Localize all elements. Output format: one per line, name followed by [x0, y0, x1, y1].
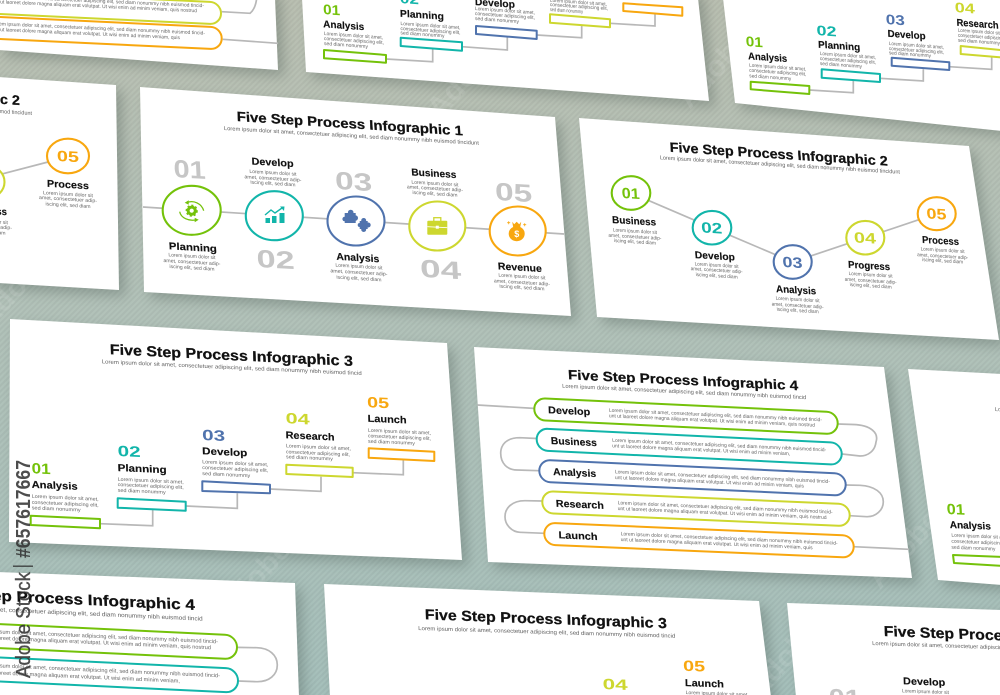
- step 04 text: amet, consectetuer adip-: [844, 277, 897, 286]
- step 01 text: Business: [612, 215, 657, 229]
- step 03 text: iscing elit, sed diam: [776, 307, 819, 315]
- step 03: consectetuer adipiscing elit,: [202, 465, 268, 474]
- step 05 node: 05: [926, 205, 947, 224]
- step 02: sed diam nonummy: [118, 488, 166, 496]
- step 02: 02: [117, 443, 141, 461]
- panel: top-right infographic 3 fragment: consectetuer adipiscing elit,: [820, 56, 876, 66]
- step 04 text: Lorem ipsum dolor sit: [848, 271, 893, 280]
- step 03 node: [774, 245, 812, 279]
- step 04: [285, 410, 353, 477]
- step 05: 05: [367, 394, 389, 412]
- step 01 text: iscing elit, sed diam: [614, 238, 656, 247]
- step 3 circle: [328, 196, 384, 246]
- step 3 text: [330, 252, 388, 283]
- row: Analysis: Analysis: [553, 467, 597, 480]
- icon: briefcase: [427, 218, 447, 235]
- step 5 text: [494, 261, 550, 292]
- panel: top-middle infographic 3 fragment: consectetuer adipiscing elit,: [400, 26, 461, 36]
- panel: bottom-right infographic 1 fragment: [787, 603, 1000, 695]
- step 5 text: Lorem ipsum dolor sit: [498, 273, 546, 281]
- row: Launch: Lorem ipsum dolor sit amet, consectetuer adipiscing elit, sed diam nonummy nibh euismod tincid-: [621, 531, 838, 547]
- step 2 text: [244, 156, 302, 188]
- panel: top-middle infographic 3 fragment: Lorem ipsum dolor sit amet,: [400, 21, 461, 31]
- panel: top-right infographic 3 fragment: consectetuer adipiscing elit,: [889, 46, 944, 56]
- title 2: Five Step Process Infographic 2: [669, 140, 888, 169]
- step 02 text: [690, 250, 743, 281]
- step 02 node: 02: [701, 219, 723, 238]
- step 03 text: amet, consectetuer adip-: [771, 301, 824, 311]
- panel: top-middle infographic 3 fragment: 01: [323, 1, 341, 18]
- row: Research: Lorem ipsum dolor sit amet, consectetuer adipiscing elit, sed diam nonummy nibh euismod tincid-: [618, 500, 833, 516]
- panel: top-middle infographic 3 fragment: sed diam nonummy: [400, 30, 445, 39]
- text: Adobe: [421, 33, 508, 125]
- step 5 text: iscing elit, sed diam: [499, 284, 545, 292]
- panel: top-middle infographic 3 fragment: consectetuer adipiscing elit,: [475, 11, 535, 21]
- panel: top-right infographic 3 fragment: sed diam nonummy: [889, 50, 932, 59]
- panel: top-right infographic 3 fragment: 03: [885, 11, 905, 28]
- step 01 node: [612, 176, 650, 210]
- step 2 text: Develop: [251, 156, 294, 170]
- step 05 text: Process: [922, 235, 960, 248]
- row: Develop: Develop: [548, 405, 590, 418]
- step 4 text: Business: [411, 167, 457, 181]
- panel: top-right infographic 3 fragment: 01: [745, 33, 763, 50]
- panel: top-right infographic 3 fragment: Analysis: [748, 51, 788, 65]
- step 03 node: 03: [782, 254, 803, 272]
- step 04: 04: [285, 410, 311, 428]
- row: Business: Business: [551, 436, 598, 449]
- panel: right infographic 3 fragment: Analysis: [950, 520, 992, 533]
- panel: left infographic 2 fragment: 05: [57, 148, 79, 166]
- icon: money bag: [507, 221, 526, 241]
- panel: top-right infographic 3 fragment: [723, 0, 1000, 131]
- panel: top-middle infographic 3 fragment: Lorem ipsum dolor sit amet,: [324, 31, 383, 41]
- panel: top-middle infographic 3 fragment: sed diam nonummy: [550, 7, 583, 15]
- row: Develop: [534, 398, 838, 434]
- title 3: Five Step Process Infographic 3: [110, 342, 353, 370]
- step 5 text: Revenue: [498, 261, 543, 275]
- row: Research: [542, 491, 850, 526]
- panel: infographic 3: [9, 319, 462, 560]
- step 02: [117, 443, 186, 511]
- step 01 text: Lorem ipsum dolor sit: [613, 227, 658, 236]
- step 02 text: iscing elit, sed diam: [695, 272, 738, 281]
- subtitle 4: Lorem ipsum dolor sit amet, consectetuer adipiscing elit, sed diam nonummy nibh euismod tincid: [562, 384, 806, 401]
- row: Research: Research: [556, 499, 604, 512]
- step 1 circle: [163, 186, 221, 235]
- step 03: Develop: [202, 446, 247, 459]
- step 05 text: amet, consectetuer adip-: [917, 252, 969, 261]
- panel: top-right infographic 3 fragment: Lorem ipsum dolor sit amet,: [749, 63, 806, 73]
- title 4: Five Step Process Infographic 4: [568, 367, 799, 393]
- panel: top-right infographic 3 fragment: sed diam nonummy: [820, 61, 863, 70]
- step 04 text: iscing elit, sed diam: [849, 282, 892, 291]
- zigzag connector: [631, 193, 937, 262]
- step 05: sed diam nonummy: [368, 439, 416, 447]
- panel: right infographic 3 fragment: [908, 369, 1000, 585]
- row: Analysis: Lorem ipsum dolor sit amet, consectetuer adipiscing elit, sed diam nonummy nibh euismod tincid-: [615, 469, 830, 485]
- step 3 text: Analysis: [336, 252, 380, 265]
- step 4 text: [407, 167, 463, 199]
- panel: left infographic 2 fragment: Process: [47, 179, 90, 192]
- panel: left infographic 2 fragment: amet, consectetuer adip-: [39, 195, 97, 204]
- panel: top-middle infographic 3 fragment: [302, 0, 709, 101]
- panel: bottom-middle infographic 3 fragment: Lorem ipsum dolor sit amet, consectetuer adipiscing elit, sed diam nonummy nibh euismod tincid: [418, 626, 675, 640]
- panel: bottom-middle infographic 3 fragment: 05: [683, 658, 705, 676]
- step 02: Planning: [117, 463, 167, 476]
- text: Adobe: [671, 23, 758, 115]
- step 2 text: iscing elit, sed diam: [250, 180, 296, 188]
- panel: bottom-left infographic 4 fragment: [0, 572, 299, 695]
- panel: top-middle infographic 3 fragment: Planning: [400, 9, 444, 23]
- panel: right infographic 3 fragment: 01: [946, 501, 965, 519]
- title 1: Five Step Process Infographic 1: [236, 109, 464, 138]
- step 03 text: Lorem ipsum dolor sit: [775, 296, 820, 304]
- step 03: [202, 427, 270, 493]
- subtitle 3: Lorem ipsum dolor sit amet, consectetuer adipiscing elit, sed diam nonummy nibh euismod tincid: [102, 359, 362, 377]
- row: Analysis: unt ut laoreet dolore magna aliquam erat volutpat. Ut wisi enim ad minim veniam, quis: [615, 475, 805, 490]
- panel: top-left infographic 4 fragment: [0, 0, 278, 70]
- panel: top-right infographic 3 fragment: sed diam nonummy: [749, 73, 792, 82]
- step 02 text: Lorem ipsum dolor sit: [694, 261, 739, 270]
- row: Research: unt ut laoreet dolore magna aliquam erat volutpat. Ut wisi enim ad minim veniam, quis nostrud: [618, 506, 827, 521]
- step 01 text: amet, consectetuer adip-: [608, 233, 662, 242]
- panel: infographic 2: [579, 118, 999, 340]
- step 3 text: Lorem ipsum dolor sit: [335, 263, 383, 271]
- step 02 text: amet, consectetuer adip-: [690, 266, 743, 275]
- stock credit: vertical watermark: Adobe Stock: [13, 571, 35, 678]
- row: Business: Lorem ipsum dolor sit amet, consectetuer adipiscing elit, sed diam nonummy nibh euismod tincid-: [612, 438, 827, 453]
- step 05: Launch: [367, 414, 407, 426]
- number 04: 04: [419, 255, 462, 285]
- step 03 text: Analysis: [776, 284, 817, 298]
- step 03: sed diam nonummy: [202, 471, 251, 479]
- step 01 text: [608, 215, 662, 247]
- step 2 text: amet, consectetuer adip-: [244, 174, 302, 184]
- number 03: 03: [334, 167, 373, 197]
- panel: top-middle infographic 3 fragment: consectetuer adipiscing elit,: [550, 2, 608, 12]
- step 05 text: iscing elit, sed diam: [922, 257, 963, 266]
- panel: top-middle infographic 3 fragment: sed diam nonummy: [475, 16, 520, 25]
- step 04: Lorem ipsum dolor sit amet,: [286, 443, 351, 452]
- step 05 text: Lorem ipsum dolor sit: [920, 246, 965, 255]
- panel: top-middle infographic 3 fragment: sed diam nonummy: [324, 41, 369, 50]
- row: Develop: unt ut laoreet dolore magna aliquam erat volutpat. Ut wisi enim ad minim veniam, quis nostrud: [609, 413, 815, 429]
- text: Adobe: [211, 533, 298, 625]
- step 05: Lorem ipsum dolor sit amet,: [368, 428, 431, 437]
- step 01 node: 01: [621, 185, 640, 203]
- panel: top-right infographic 3 fragment: Lorem ipsum dolor sit amet,: [889, 41, 944, 51]
- step 01: 01: [31, 460, 51, 478]
- row: Launch: Launch: [558, 530, 598, 543]
- row: Develop: Lorem ipsum dolor sit amet, consectetuer adipiscing elit, sed diam nonummy nibh euismod tincid-: [609, 408, 822, 423]
- stock credit: vertical watermark: #657617667: [13, 460, 35, 558]
- step 1 text: Planning: [169, 241, 217, 255]
- step 4 text: iscing elit, sed diam: [412, 190, 458, 199]
- step 05: consectetuer adipiscing elit,: [368, 433, 431, 442]
- panel: top-right infographic 3 fragment: 02: [816, 22, 837, 39]
- row: Business: unt ut laoreet dolore magna aliquam erat volutpat. Ut wisi enim ad minim veniam,: [612, 443, 790, 457]
- step 05: [367, 394, 434, 461]
- row: Business: [537, 428, 842, 465]
- step 01: consectetuer adipiscing elit,: [32, 500, 99, 509]
- number 02: 02: [256, 245, 295, 275]
- step 1 text: amet, consectetuer adip-: [163, 258, 221, 267]
- panel: right infographic 3 fragment: sed diam nonummy: [951, 545, 996, 552]
- step 05 node: [918, 197, 956, 230]
- panel: bottom-middle infographic 3 fragment: 04: [602, 676, 629, 694]
- panel: bottom-middle infographic 3 fragment: [324, 584, 771, 695]
- panel: bottom-middle infographic 3 fragment: Launch: [685, 678, 724, 690]
- step 04: sed diam nonummy: [286, 454, 334, 462]
- panel: top-middle infographic 3 fragment: Analysis: [323, 19, 365, 33]
- step 4 text: amet, consectetuer adip-: [407, 184, 463, 194]
- panel: top-right infographic 3 fragment: Planning: [818, 40, 860, 54]
- panel: left infographic 2 fragment: [0, 77, 119, 290]
- number 01: 01: [173, 155, 206, 185]
- step 03: Lorem ipsum dolor sit amet,: [202, 459, 268, 468]
- step 1 text: [163, 241, 221, 273]
- step 03 text: [771, 284, 824, 315]
- subtitle 2: Lorem ipsum dolor sit amet, consectetuer adipiscing elit, sed diam nonummy nibh euismod tincidunt: [660, 155, 901, 176]
- step 1 text: iscing elit, sed diam: [169, 264, 215, 273]
- step 3 text: iscing elit, sed diam: [336, 275, 382, 283]
- panel: top-middle infographic 3 fragment: Lorem ipsum dolor sit amet,: [475, 6, 535, 16]
- icon: gear with arrows: [180, 200, 204, 222]
- row: Launch: unt ut laoreet dolore magna aliquam erat volutpat. Ut wisi enim ad minim veniam, quis: [621, 537, 813, 551]
- step 4 text: Lorem ipsum dolor sit: [411, 180, 459, 188]
- panel: left infographic 2 fragment: iscing elit, sed diam: [45, 201, 91, 210]
- panel: bottom-middle infographic 3 fragment: Five Step Process Infographic 3: [425, 607, 667, 632]
- step 04 node: [846, 221, 884, 254]
- icon: rising bar chart: [265, 206, 284, 223]
- step 03: 03: [202, 427, 225, 445]
- stock credit: vertical watermark: [13, 460, 35, 678]
- panel: top-right infographic 3 fragment: Develop: [887, 29, 926, 42]
- step 4 circle: [409, 202, 465, 250]
- row: Launch: [544, 523, 854, 558]
- step 5 circle: [490, 206, 546, 256]
- step 01: Lorem ipsum dolor sit amet,: [32, 494, 99, 503]
- icon: puzzle pieces: [342, 210, 371, 232]
- step 04 text: [844, 260, 897, 291]
- step 02 text: Develop: [695, 250, 735, 263]
- step 3 text: amet, consectetuer adip-: [330, 268, 388, 278]
- panel: top-right infographic 3 fragment: consectetuer adipiscing elit,: [749, 68, 806, 78]
- step 1 text: Lorem ipsum dolor sit: [168, 252, 216, 261]
- row: Analysis: [539, 460, 846, 496]
- number 05: 05: [494, 178, 533, 208]
- step 04: consectetuer adipiscing elit,: [286, 449, 350, 458]
- panel: infographic 1: [140, 87, 571, 316]
- timeline line: [143, 207, 564, 234]
- step 05 text: [917, 235, 969, 266]
- subtitle 1: Lorem ipsum dolor sit amet, consectetuer adipiscing elit, sed diam nonummy nibh euismod tincidunt: [224, 126, 480, 147]
- panel: top-right infographic 3 fragment: Lorem ipsum dolor sit amet,: [820, 51, 876, 61]
- panel: infographic 4: [474, 347, 912, 578]
- icon: money bag: $: [514, 229, 519, 239]
- step 5 text: amet, consectetuer adip-: [494, 278, 550, 288]
- step 02: consectetuer adipiscing elit,: [118, 482, 184, 491]
- step 01: Analysis: [31, 480, 78, 493]
- step 01: sed diam nonummy: [32, 505, 81, 514]
- panel: top-middle infographic 3 fragment: consectetuer adipiscing elit,: [324, 36, 384, 46]
- step 2 text: Lorem ipsum dolor sit: [249, 169, 297, 178]
- step 2 circle: [246, 191, 303, 240]
- step 02 node: [693, 211, 731, 244]
- step 04 node: 04: [854, 229, 877, 248]
- step 02: Lorem ipsum dolor sit amet,: [118, 477, 184, 486]
- panel: left infographic 2 fragment: Lorem ipsum dolor sit: [43, 190, 94, 199]
- step 01: [31, 460, 100, 528]
- step 04: Research: [285, 430, 335, 444]
- panel: bottom-right infographic 1 fragment: Develop: [903, 676, 945, 689]
- serpentine connector: [477, 405, 909, 549]
- step 04 text: Progress: [848, 260, 891, 273]
- step connectors: [100, 460, 403, 526]
